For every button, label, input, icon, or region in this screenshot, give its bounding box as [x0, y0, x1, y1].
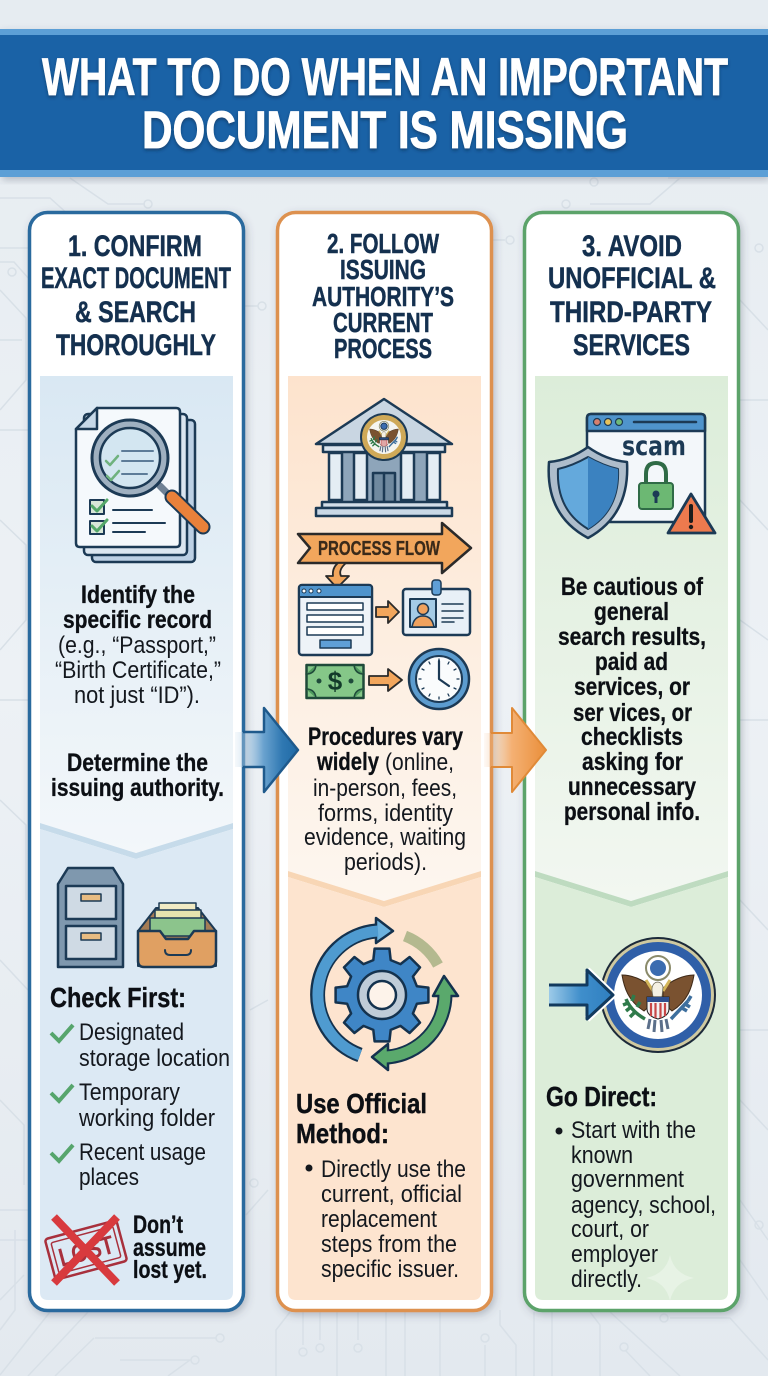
text: determine authority — [51, 749, 224, 802]
icon: green check — [51, 1145, 73, 1161]
arrow: curved down — [326, 563, 349, 588]
text: identify the record: specific record — [63, 606, 212, 634]
panel: step 3 avoid — [524, 212, 738, 1310]
text: procedures vary widely: periods). — [344, 849, 427, 876]
bullet: directly use current steps: current, official — [321, 1181, 462, 1208]
heading: step 3: UNOFFICIAL & — [548, 262, 716, 295]
arrow: go direct — [549, 970, 613, 1019]
text: be cautious: services, or — [574, 673, 690, 701]
text: procedures vary widely: evidence, waiting — [304, 824, 466, 851]
heading: step 1: EXACT DOCUMENT — [41, 262, 231, 295]
subheading: use official method: Use Official — [296, 1088, 427, 1119]
heading: step 1 — [41, 230, 231, 362]
icon: scam browser window: scam — [622, 431, 686, 462]
text: identify the record: (e.g., “Passport,” — [58, 632, 216, 659]
text: be cautious: Be cautious of — [561, 573, 704, 601]
text: do not assume lost: assume — [133, 1234, 206, 1262]
icon: green check — [51, 1025, 73, 1041]
heading: step 3 — [548, 230, 716, 362]
icon: warning triangle — [668, 494, 715, 533]
text: procedures vary widely: forms, identity — [318, 800, 453, 827]
text: procedures vary widely: in-person, fees, — [313, 775, 457, 802]
icon: scam browser window — [587, 414, 705, 522]
title: DOCUMENT IS MISSING — [142, 101, 628, 160]
bullet: directly use current steps: Directly use the — [321, 1156, 466, 1183]
text: be cautious: unnecessary — [568, 773, 696, 801]
heading: step 1: 1. CONFIRM — [68, 230, 202, 263]
icon: document and magnifier — [76, 408, 203, 562]
text: identify the record: Identify the — [81, 581, 195, 609]
bullet: start with known agency: known — [571, 1142, 633, 1169]
subheading: check first: Check First: — [50, 982, 186, 1013]
icon: clock — [409, 649, 469, 709]
heading: step 3: 3. AVOID — [582, 230, 682, 263]
icon: filing cabinet — [58, 868, 123, 967]
text: be cautious: checklists — [581, 723, 683, 751]
heading: step 3: THIRD-PARTY — [550, 296, 712, 329]
heading: step 1: & SEARCH — [75, 296, 196, 329]
text: be cautious: asking for — [582, 748, 683, 776]
heading: step 1: THOROUGHLY — [56, 329, 216, 362]
text: be cautious: search results, — [558, 623, 706, 651]
text: procedures vary widely: widely — [316, 748, 379, 776]
heading: step 2: PROCESS — [334, 333, 432, 364]
bullet: directly use current steps: specific issuer. — [321, 1256, 459, 1283]
text: procedures vary widely: Procedures vary — [308, 723, 463, 751]
bullet: directly use current steps — [306, 1156, 466, 1283]
icon: green check — [51, 1085, 73, 1101]
arrow: process flow — [298, 523, 471, 573]
arrow: process flow: PROCESS FLOW — [318, 538, 440, 560]
text: be cautious: paid ad — [595, 648, 668, 676]
panel: step 1 confirm — [30, 212, 244, 1310]
arrow: step 2 to step 3 — [484, 708, 546, 792]
bullet: start with known agency — [556, 1117, 716, 1293]
arrow: step 1 to step 2 — [235, 708, 298, 792]
icon: crossed out lost stamp: LOST — [55, 1229, 117, 1273]
text: identify the record — [55, 581, 221, 709]
bullet: directly use current steps: replacement — [321, 1206, 437, 1233]
checklist: places — [79, 1164, 139, 1191]
icon: shield — [549, 447, 627, 538]
heading: step 2: CURRENT — [333, 307, 433, 338]
icon: money — [306, 665, 364, 698]
bullet: start with known agency: court, or — [571, 1216, 649, 1243]
bullet: start with known agency: Start with the — [571, 1117, 696, 1144]
checklist: storage location — [79, 1045, 230, 1072]
checklist — [51, 1019, 230, 1191]
arrow: form to id — [376, 601, 399, 623]
subheading: use official method — [296, 1088, 427, 1149]
checklist: Recent usage — [79, 1139, 206, 1166]
text: determine authority: Determine the — [67, 749, 208, 777]
arrow: money to clock — [369, 669, 402, 691]
icon: official seal — [600, 937, 716, 1053]
heading: step 2: AUTHORITY’S — [312, 281, 454, 312]
icon: money: $ — [328, 666, 343, 696]
subheading: use official method: Method: — [296, 1118, 389, 1149]
bullet: start with known agency: employer — [571, 1241, 658, 1268]
text: do not assume lost — [133, 1211, 207, 1284]
heading: step 2: 2. FOLLOW — [327, 228, 439, 259]
icon: file tray — [138, 903, 216, 967]
subheading: go direct: Go Direct: — [546, 1081, 657, 1112]
icon: id badge — [403, 580, 470, 635]
icon: crossed out lost stamp — [45, 1217, 127, 1283]
text: do not assume lost: Don’t — [133, 1211, 184, 1239]
icon: web form window — [299, 585, 372, 655]
text: procedures vary widely — [304, 723, 466, 876]
bullet: start with known agency: directly. — [571, 1266, 642, 1293]
text: identify the record: “Birth Certificate,” — [55, 657, 221, 684]
text: be cautious: ser vices, or — [573, 699, 692, 727]
icon: government building — [316, 399, 452, 516]
heading: step 3: SERVICES — [573, 329, 690, 362]
text: procedures vary widely: (online, — [385, 749, 454, 776]
text: be cautious: personal info. — [564, 798, 700, 826]
bullet: start with known agency: agency, school, — [571, 1192, 716, 1219]
text: be cautious — [558, 573, 706, 826]
heading: step 2: ISSUING — [340, 254, 426, 285]
bullet: directly use current steps: steps from the — [321, 1231, 457, 1258]
icon: cycle gear with arrows — [318, 918, 458, 1070]
heading: step 2 — [312, 228, 454, 364]
text: identify the record: not just “ID”). — [74, 682, 200, 709]
panel: step 2 follow — [278, 212, 492, 1310]
text: do not assume lost: lost yet. — [133, 1256, 207, 1284]
title banner — [0, 29, 768, 177]
text: be cautious: general — [594, 598, 669, 626]
checklist: Temporary — [79, 1079, 180, 1106]
text: determine authority: issuing authority. — [51, 774, 224, 802]
title — [42, 48, 728, 160]
checklist: Designated — [79, 1019, 184, 1046]
bullet: start with known agency: government — [571, 1166, 684, 1193]
checklist: working folder — [78, 1105, 215, 1132]
